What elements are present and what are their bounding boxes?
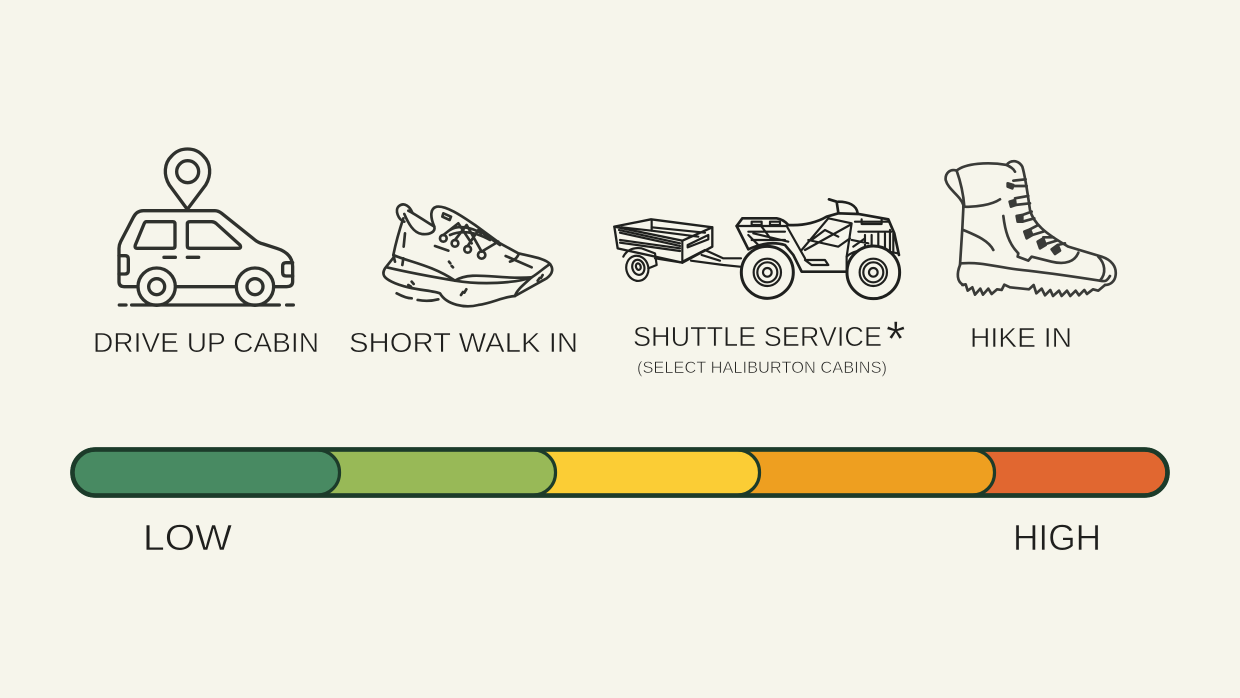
boot laces [1008,179,1065,254]
ATV body [737,199,899,272]
icon: running shoe [383,204,552,306]
car wheels [138,268,274,305]
location pin [165,149,210,209]
segment: yellow [72,450,760,495]
segment: green [72,450,340,495]
label: shuttle service: SHUTTLE SERVICE [633,321,882,352]
label: high: HIGH [1013,517,1101,558]
asterisk: * [886,311,905,367]
bar outline [72,450,1168,496]
label: drive up cabin: DRIVE UP CABIN [93,327,319,358]
segment: orange [72,450,994,495]
car body [119,211,293,287]
ATV wheels [741,246,900,299]
icon: car with location pin [119,149,293,305]
trailer [614,219,741,283]
road line [119,300,293,310]
label: short walk in: SHORT WALK IN [349,327,578,358]
label: low: LOW [143,517,232,558]
note: select haliburton cabins: (SELECT HALIBURTON CABINS) [637,358,887,377]
segment: light green [72,450,556,495]
scale bar [72,450,1168,496]
label: hike in: HIKE IN [970,322,1072,353]
icon: hiking boot [946,161,1116,296]
segment: red [72,450,1168,496]
icon: ATV towing trailer [614,199,900,299]
